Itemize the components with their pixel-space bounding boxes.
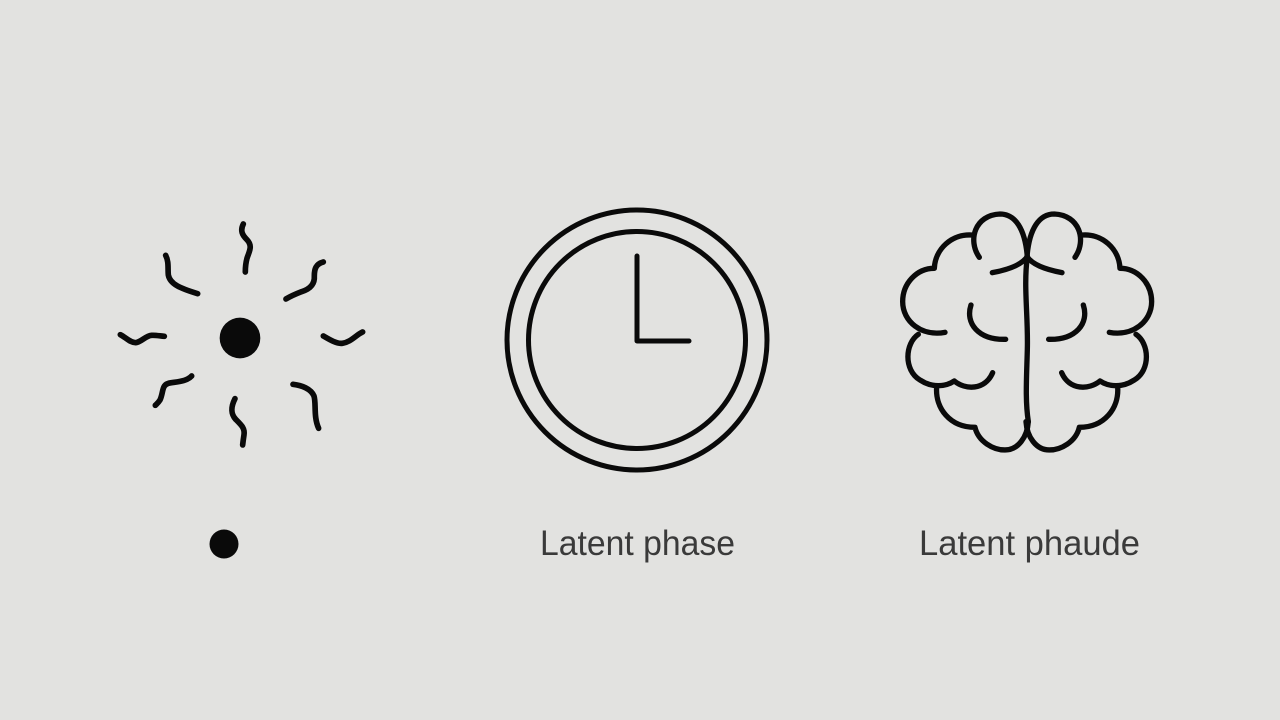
label: latent phaude: Latent phaude (919, 524, 1140, 563)
label: latent phase: Latent phase (540, 524, 735, 563)
icon: central dot with radiating wavy lines (120, 224, 363, 445)
icon: brain (903, 214, 1152, 450)
icon: small black dot (210, 530, 238, 558)
icon: clock (507, 210, 767, 470)
